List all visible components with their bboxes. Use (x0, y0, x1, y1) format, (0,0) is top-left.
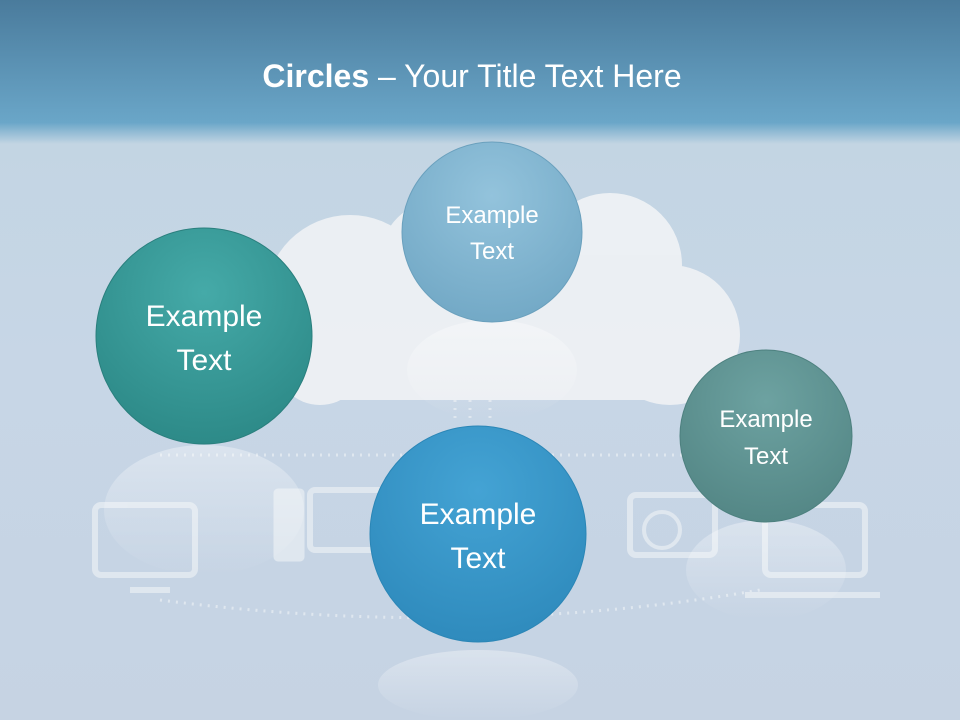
circle: left teal: Example (146, 300, 262, 333)
circle: bottom blue: Text (450, 542, 506, 575)
circle: right: Example (719, 406, 813, 433)
circle: top: Example (445, 202, 539, 229)
reflections (104, 320, 846, 720)
circle: right: Text (744, 443, 788, 470)
circle: left teal (96, 228, 312, 444)
circle: left teal: Text (176, 344, 232, 377)
circle: bottom blue: Example (420, 498, 536, 531)
cloud (265, 193, 740, 405)
circle: right (680, 350, 852, 522)
devices network (95, 400, 880, 618)
title: Circles – Your Title Text Here (262, 58, 682, 94)
circle: top: Text (470, 238, 514, 265)
circle: top (402, 142, 582, 322)
circle: bottom blue (370, 426, 586, 642)
